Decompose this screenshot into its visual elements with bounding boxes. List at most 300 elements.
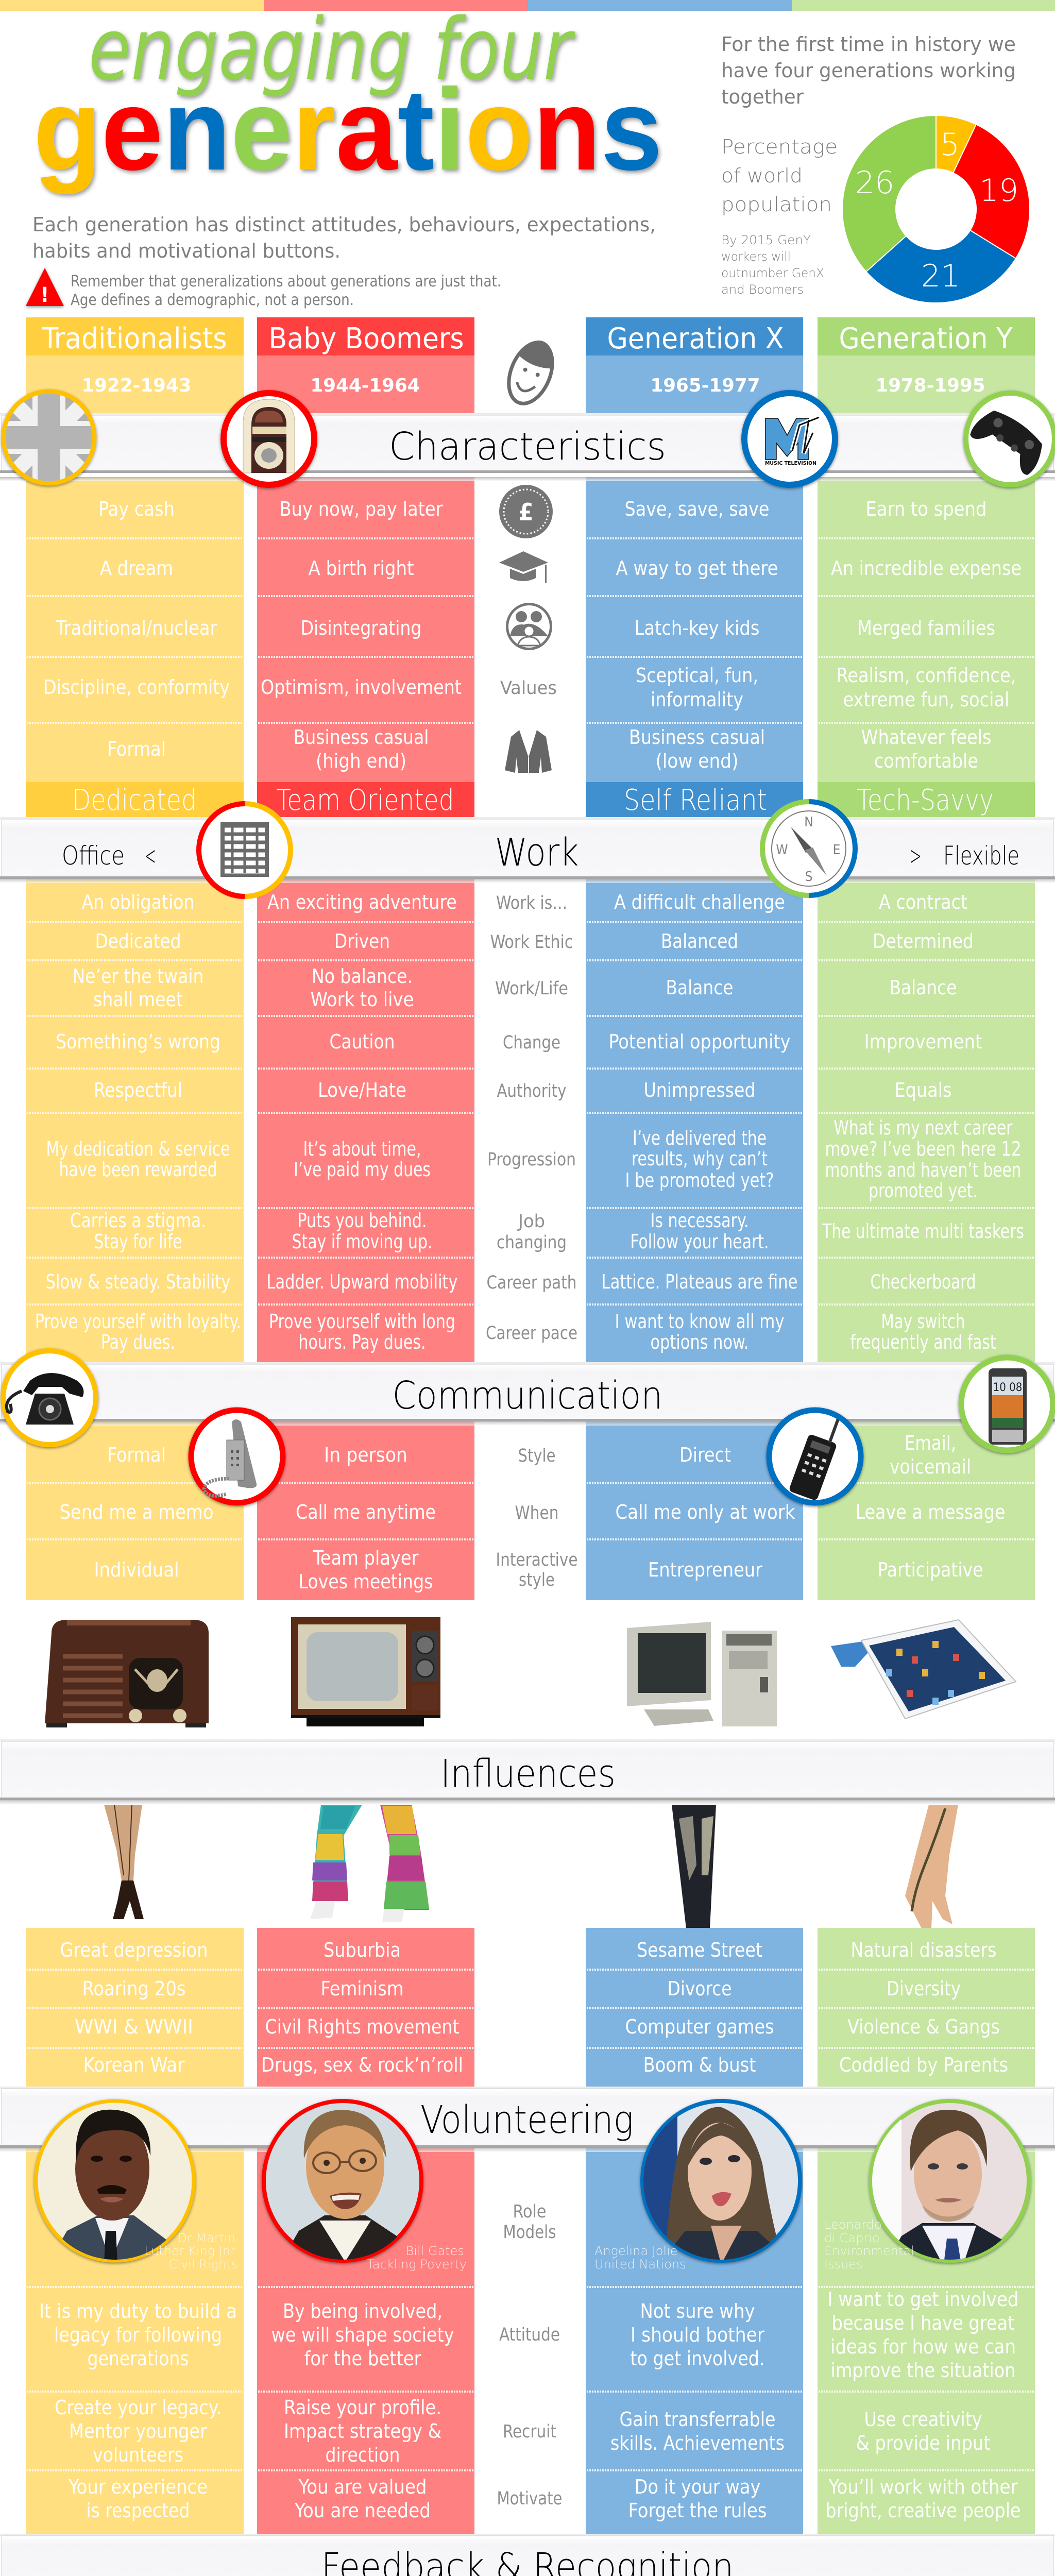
heading: Communication: Communication xyxy=(393,1374,662,1418)
cell: No balance xyxy=(310,965,414,1011)
cell: Your experience is respected: is respected xyxy=(87,2499,190,2522)
cell: Computer games: Computer games xyxy=(625,2015,774,2038)
title: generations: generations xyxy=(33,64,662,194)
percentage caption: Percentage xyxy=(721,135,838,158)
panel: Generation X characteristics xyxy=(586,355,803,819)
cell: Drugs, sex & rock'n'roll: Drugs, sex & rock’n’roll xyxy=(261,2054,463,2076)
trait: Tech-Savvy: Tech-Savvy xyxy=(857,784,994,817)
cell: Caution: Caution xyxy=(330,1030,395,1053)
cell: Team player xyxy=(299,1547,433,1593)
label: Office: Office xyxy=(62,841,125,871)
cell: By being involved: for the better xyxy=(304,2347,421,2370)
cell: Business casual (low end): (low end) xyxy=(655,750,739,772)
cell: Gain transferrable skills: skills. Achievements xyxy=(610,2432,785,2454)
cell: Natural disasters: Natural disasters xyxy=(851,1939,996,1961)
cell: I've delivered the results: I’ve delivered the xyxy=(633,1127,767,1149)
panel: Baby Boomers influences xyxy=(257,1928,474,2089)
caption: Dr Martin Luther King Jnr: Luther King Jnr xyxy=(144,2244,235,2258)
cell: Call me only at work: Call me only at work xyxy=(615,1501,795,1523)
heading band: Communication xyxy=(0,1362,1055,1426)
panel: Traditionalists influences xyxy=(26,1928,244,2089)
arrow: less than: < xyxy=(145,841,156,871)
cell: Optimism, involvement: Optimism, involvement xyxy=(261,676,462,699)
cell: Individual: Individual xyxy=(94,1558,179,1581)
GenY note: and Boomers xyxy=(721,282,804,297)
cell: Formal: Formal xyxy=(107,738,166,760)
label: Change: Change xyxy=(503,1032,560,1053)
label: Work Ethic: Work Ethic xyxy=(490,932,573,953)
caption: Angelina Jolie: United Nations xyxy=(594,2257,686,2272)
cell: Checkerboard: Checkerboard xyxy=(871,1270,976,1293)
cell: Balanced: Balanced xyxy=(661,930,738,953)
icon: rotary telephone circle xyxy=(3,1351,96,1445)
caption: Angelina Jolie: Angelina Jolie xyxy=(594,2244,678,2258)
intro text: habits and motivational buttons. xyxy=(32,240,341,262)
header: Generation Y xyxy=(818,317,1035,355)
label: Role Models: Role xyxy=(513,2201,546,2222)
label: Role Models xyxy=(503,2201,556,2243)
label: Job changing: changing xyxy=(497,1232,567,1253)
cell: It's about time: I’ve paid my dues xyxy=(294,1158,431,1181)
heading: Influences: Influences xyxy=(440,1752,616,1796)
cell: An exciting adventure: An exciting adventure xyxy=(267,891,457,913)
cell: I want to know all my options xyxy=(615,1310,784,1353)
cell: Whatever feels comfortable: comfortable xyxy=(874,750,978,772)
panel: Traditionalists volunteering xyxy=(26,2148,244,2536)
cell: Slow & steady: Slow & steady. Stability xyxy=(45,1270,231,1293)
cell: I want to know all my options: I want to know all my xyxy=(615,1310,784,1333)
cell: Whatever feels comfortable: Whatever feels xyxy=(861,726,991,749)
icon: union jack circle xyxy=(3,392,95,484)
panel: Generation Y influences xyxy=(818,1928,1035,2089)
warning note: Remember that generalizations about generations are just that. xyxy=(71,273,501,291)
cell: Ne'er the twain shall meet: Ne’er the twain xyxy=(72,965,204,988)
cell: Use creativity: Use creativity xyxy=(864,2408,982,2431)
years: 1944-1964 xyxy=(310,375,420,396)
cell: Send me a memo: Send me a memo xyxy=(60,1501,213,1523)
cell: An obligation: An obligation xyxy=(81,891,195,913)
cell: I've delivered the results: results, why can’t xyxy=(632,1147,768,1170)
caption: Leonardo di Caprio: Issues xyxy=(824,2257,863,2272)
heading: Work: Work xyxy=(495,831,579,875)
donut chart: percentage of world population: 5 xyxy=(940,127,960,163)
cell: Ne'er the twain shall meet: shall meet xyxy=(93,988,183,1011)
label: Career pace: Career pace xyxy=(486,1323,577,1344)
label: Progression: Progression xyxy=(487,1149,576,1170)
years: 1978-1995 xyxy=(876,375,985,396)
cell: I want to get involved xyxy=(827,2288,1019,2382)
cell: What is my next career move: What is my next career xyxy=(833,1116,1013,1139)
cell: Realism, confidence, extreme fun, social: Realism, confidence, xyxy=(837,664,1016,687)
icon: compass circle: E xyxy=(833,842,840,858)
panel: Generation Y work xyxy=(818,879,1035,1364)
cell: Korean War: Korean War xyxy=(83,2054,185,2076)
cell: Is necessary: Follow your heart. xyxy=(631,1230,769,1253)
warning note xyxy=(71,273,501,309)
panel: Generation X volunteering xyxy=(586,2148,803,2536)
icon: smartphone circle: 10 08 xyxy=(993,1381,1022,1394)
cell: Love/Hate: Love/Hate xyxy=(318,1079,406,1101)
section columns: volunteering xyxy=(26,2148,1035,2536)
trait: Self Reliant: Self Reliant xyxy=(624,784,767,817)
donut chart: percentage of world population: 26 xyxy=(855,165,894,201)
cell: Sceptical, fun, informality: informality xyxy=(651,688,743,711)
image: vintage radio xyxy=(45,1620,209,1727)
image: old desktop computer xyxy=(627,1622,777,1726)
cell: Boom & bust: Boom & bust xyxy=(643,2054,756,2076)
cell: Carries a stigma: Stay for life xyxy=(94,1230,182,1253)
arrow: greater than: > xyxy=(910,841,922,871)
cell: Whatever feels comfortable xyxy=(861,726,991,772)
trait: Dedicated: Dedicated xyxy=(72,784,197,817)
cell: Leave a message: Leave a message xyxy=(855,1501,1006,1523)
trait: Team Oriented: Team Oriented xyxy=(276,784,454,817)
panel: work row labels xyxy=(486,893,577,1344)
cell: Business casual (low end) xyxy=(629,726,765,772)
label: Flexible: Flexible xyxy=(943,841,1019,871)
heading band: Characteristics xyxy=(0,413,1055,481)
intro text: Each generation has distinct attitudes, behaviours, expectations, xyxy=(32,213,656,236)
cell: You are valued: You are valued xyxy=(298,2476,427,2498)
cell: Call me anytime: Call me anytime xyxy=(296,1501,436,1523)
cell: No balance: No balance. xyxy=(312,965,413,988)
cell: Unimpressed: Unimpressed xyxy=(644,1079,755,1101)
label: Role Models: Models xyxy=(503,2222,556,2243)
cell: Prove yourself with long hours: Prove yourself with long xyxy=(269,1310,455,1333)
cell: Email, voicemail xyxy=(890,1432,971,1478)
label: Motivate: Motivate xyxy=(497,2488,563,2509)
caption: Bill Gates: Bill Gates xyxy=(406,2244,464,2258)
donut chart: percentage of world population: 21 xyxy=(921,258,960,294)
cell: Email, voicemail: voicemail xyxy=(890,1455,971,1478)
heading band: Volunteering xyxy=(0,2087,1055,2152)
cell: Something's wrong: Something’s wrong xyxy=(56,1030,220,1053)
label: Job changing: Job xyxy=(517,1211,545,1232)
GenY note xyxy=(721,233,824,297)
cell: Balance: Balance xyxy=(666,976,734,999)
label: Interactive style xyxy=(496,1550,578,1590)
cell: Your experience is respected: Your experience xyxy=(68,2476,208,2498)
icon: MTV logo circle xyxy=(744,393,835,485)
image: tablet xyxy=(831,1620,1016,1719)
panel: Baby Boomers communication xyxy=(257,1421,474,1600)
cell: My dedication & service: My dedication & service xyxy=(46,1138,230,1160)
cell: Lattice: Lattice. Plateaus are fine xyxy=(602,1270,797,1293)
icon: pound coin xyxy=(499,485,553,538)
cell: It's about time xyxy=(294,1138,431,1181)
image: stockinged legs xyxy=(104,1805,144,1919)
cell: Prove yourself with long hours: hours. Pay dues. xyxy=(299,1331,426,1353)
cell: Buy now, pay later: Buy now, pay later xyxy=(279,498,443,520)
panel: Traditionalists characteristics xyxy=(26,355,244,819)
history statement: together xyxy=(721,86,804,108)
panel: volunteering row labels xyxy=(497,2201,563,2509)
label: Attitude: Attitude xyxy=(499,2325,560,2345)
cell: Raise your profile: direction xyxy=(326,2444,400,2466)
cell: Ne'er the twain shall meet xyxy=(72,965,204,1011)
icon: compass circle: S xyxy=(805,869,812,885)
section columns: work xyxy=(26,879,1035,1364)
cell: Raise your profile: Impact strategy & xyxy=(284,2420,441,2443)
caption: Bill Gates xyxy=(367,2244,467,2272)
section columns: influences xyxy=(26,1928,1035,2089)
cell: Team player: Loves meetings xyxy=(299,1570,433,1593)
cell: I want to know all my options: options now. xyxy=(650,1331,749,1353)
cell: Business casual (high end): (high end) xyxy=(316,750,406,772)
header: Traditionalists: Traditionalists xyxy=(41,322,227,355)
cell: Business casual (high end): Business casual xyxy=(294,726,429,749)
cell: Do it your way xyxy=(628,2476,767,2522)
cell: Balance: Balance xyxy=(889,976,957,999)
cell: Not sure why xyxy=(631,2300,765,2370)
cell: A birth right: A birth right xyxy=(308,557,414,580)
cell: It's about time: It’s about time, xyxy=(303,1138,421,1160)
cell: No balance: Work to live xyxy=(310,988,414,1011)
cell: Prove yourself with long hours xyxy=(269,1310,455,1353)
intro text xyxy=(32,213,656,262)
cell: You'll work with other xyxy=(825,2476,1021,2522)
cell: Your experience is respected xyxy=(68,2476,208,2522)
cell: May switch frequently: frequently and fast xyxy=(850,1331,996,1353)
heading band: Feedback & Recognition xyxy=(0,2534,1055,2576)
cell: Business casual (high end) xyxy=(294,726,429,772)
years: 1965-1977 xyxy=(650,375,760,396)
cell: My dedication & service: have been rewarded xyxy=(59,1158,217,1181)
panel: communication row labels xyxy=(496,1446,578,1590)
cell: It is my duty: It is my duty to build a xyxy=(39,2300,237,2323)
label: Interactive style: Interactive xyxy=(496,1550,578,1570)
label: Career path: Career path xyxy=(486,1273,577,1293)
label: Recruit: Recruit xyxy=(503,2421,556,2442)
donut chart: percentage of world population: 19 xyxy=(979,173,1018,209)
cell: Direct: Direct xyxy=(679,1444,731,1466)
cell: May switch frequently xyxy=(850,1310,996,1353)
icon: wall phone circle xyxy=(191,1410,283,1503)
GenY note: outnumber GenX xyxy=(721,266,824,280)
header: Generation X xyxy=(586,317,803,355)
panel: Generation X communication xyxy=(586,1421,803,1600)
icon: smartphone circle xyxy=(961,1358,1053,1450)
icon: jacket xyxy=(505,730,552,773)
image: vintage television xyxy=(291,1617,440,1726)
cell: Roaring 20s: Roaring 20s xyxy=(82,1977,185,2000)
panel: Baby Boomers characteristics xyxy=(257,355,474,819)
label: Job changing xyxy=(497,1211,567,1253)
cell: Entrepreneur: Entrepreneur xyxy=(648,1558,763,1581)
cell: Merged families: Merged families xyxy=(857,617,995,639)
cell: A dream: A dream xyxy=(100,557,173,580)
cell: It is my duty: generations xyxy=(88,2347,189,2370)
cell: Is necessary xyxy=(631,1209,769,1253)
cell: Formal: Formal xyxy=(107,1444,166,1466)
generation headers xyxy=(26,317,1035,355)
icon: pound coin: £ xyxy=(519,498,533,526)
panel: Generation Y communication xyxy=(818,1421,1035,1600)
cell: Civil Rights movement: Civil Rights movement xyxy=(265,2015,460,2038)
portrait: Leonardo di Caprio xyxy=(871,2101,1029,2264)
cell: A contract: A contract xyxy=(879,891,967,913)
icon: people circle xyxy=(506,603,552,650)
cell: Determined: Determined xyxy=(873,930,974,953)
cell: Respectful: Respectful xyxy=(94,1079,182,1101)
heading: Characteristics: Characteristics xyxy=(389,425,666,469)
cell: Feminism: Feminism xyxy=(320,1977,404,2000)
cell: Not sure why: I should bother xyxy=(631,2324,765,2346)
cell: By being involved: we will shape society xyxy=(271,2324,454,2346)
cell: Carries a stigma xyxy=(70,1209,206,1253)
portrait: Angelina Jolie xyxy=(641,2101,800,2264)
cell: Raise your profile: Raise your profile. xyxy=(284,2396,441,2419)
cell: Equals: Equals xyxy=(894,1079,952,1101)
cell: Realism, confidence, extreme fun, social xyxy=(837,664,1016,711)
caption: Dr Martin Luther King Jnr: Dr Martin xyxy=(177,2231,235,2245)
panel: Baby Boomers volunteering xyxy=(257,2148,474,2536)
cell: A way to get there: A way to get there xyxy=(616,557,778,580)
cell: Dedicated: Dedicated xyxy=(95,930,181,953)
label: When: When xyxy=(515,1503,558,1523)
header: Generation X: Generation X xyxy=(607,322,784,355)
cell: Participative: Participative xyxy=(878,1558,983,1581)
cell: Create your legacy xyxy=(55,2396,222,2466)
icon: compass circle xyxy=(762,802,855,895)
cell: Do it your way: Forget the rules xyxy=(628,2499,767,2522)
portrait: Bill Gates xyxy=(264,2101,421,2267)
GenY note: By 2015 GenY xyxy=(721,233,811,247)
cell: Pay cash: Pay cash xyxy=(98,498,175,520)
GenY note: workers will xyxy=(721,249,791,264)
cell: By being involved xyxy=(271,2300,454,2370)
cell: Divorce: Divorce xyxy=(668,1977,731,2000)
cell: Driven: Driven xyxy=(334,930,390,953)
cell: Violence & Gangs: Violence & Gangs xyxy=(847,2015,1000,2038)
cell: The ultimate multi taskers: The ultimate multi taskers xyxy=(822,1220,1024,1243)
cell: Not sure why: Not sure why xyxy=(640,2300,755,2323)
cell: Potential opportunity: Potential opportunity xyxy=(609,1030,790,1053)
icon: office building circle xyxy=(199,804,291,896)
caption: Dr Martin Luther King Jnr: Civil Rights xyxy=(169,2257,237,2272)
cell: Use creativity: & provide input xyxy=(856,2432,990,2454)
cell: Gain transferrable skills xyxy=(610,2408,785,2454)
label: Style: Style xyxy=(518,1446,555,1466)
section columns: communication xyxy=(26,1421,1035,1600)
image: dark patterned jeans xyxy=(672,1805,716,1928)
cell: An incredible expense: An incredible expense xyxy=(831,557,1022,580)
cell: A difficult challenge: A difficult challenge xyxy=(614,891,785,913)
years: 1922-1943 xyxy=(81,375,192,396)
caption: Leonardo di Caprio: Leonardo xyxy=(824,2217,882,2232)
panel: Generation X influences xyxy=(586,1928,803,2089)
cell: I've delivered the results: I be promoted yet? xyxy=(625,1169,774,1192)
header: Generation Y: Generation Y xyxy=(839,322,1013,355)
cell: It is my duty xyxy=(39,2300,237,2370)
icon: game controller circle xyxy=(966,393,1054,485)
panel: Generation X work xyxy=(586,879,803,1364)
cell: May switch frequently: May switch xyxy=(881,1310,965,1333)
cell: You'll work with other: You’ll work with other xyxy=(828,2476,1018,2498)
cell: Sceptical, fun, informality xyxy=(636,664,758,711)
cell: You'll work with other: bright, creative people xyxy=(825,2499,1021,2522)
cell: Coddled by Parents: Coddled by Parents xyxy=(839,2054,1008,2076)
cell: My dedication & service xyxy=(46,1138,230,1181)
icon: compass circle: N xyxy=(804,815,813,830)
cell: Earn to spend: Earn to spend xyxy=(865,498,987,520)
cell: Disintegrating: Disintegrating xyxy=(301,617,421,639)
cell: Not sure why: to get involved. xyxy=(631,2347,764,2370)
cell: By being involved: By being involved, xyxy=(283,2300,443,2323)
heading band: Work xyxy=(0,817,1055,883)
icon: jukebox circle xyxy=(224,393,314,485)
icon: MTV logo circle: MUSIC TELEVISION xyxy=(765,461,816,466)
cell: Is necessary: Is necessary. xyxy=(650,1209,749,1232)
cell: It is my duty: legacy for following xyxy=(54,2324,222,2346)
icon: warning triangle: ! xyxy=(41,283,49,307)
label: Interactive style: style xyxy=(519,1570,555,1590)
cell: Team player: Team player xyxy=(313,1547,419,1569)
cell: In person: In person xyxy=(324,1444,407,1466)
panel: Generation Y characteristics xyxy=(818,355,1035,819)
cell: Improvement: Improvement xyxy=(864,1030,982,1053)
cell: Do it your way: Do it your way xyxy=(635,2476,760,2498)
percentage caption: of world xyxy=(721,164,803,187)
cell: Puts you behind xyxy=(292,1209,433,1253)
caption: Leonardo di Caprio: Environmental xyxy=(824,2244,914,2258)
cell: Realism, confidence, extreme fun, social: extreme fun, social xyxy=(843,688,1010,711)
cell: Puts you behind: Stay if moving up. xyxy=(292,1230,433,1253)
cell: Diversity: Diversity xyxy=(887,1977,961,2000)
panel: Baby Boomers work xyxy=(257,879,474,1364)
cell: Puts you behind: Puts you behind. xyxy=(298,1209,427,1232)
cell: Traditional/nuclear: Traditional/nuclear xyxy=(56,617,217,639)
cell: Create your legacy: volunteers xyxy=(93,2444,183,2466)
label: Authority: Authority xyxy=(497,1081,567,1101)
cell: Sesame Street: Sesame Street xyxy=(637,1939,762,1961)
cell: You are valued: You are needed xyxy=(294,2499,431,2522)
cell: What is my next career move: months and haven’t been xyxy=(825,1159,1021,1181)
caption: Leonardo di Caprio: di Caprio xyxy=(824,2231,879,2245)
label: Work/Life: Work/Life xyxy=(495,978,568,999)
header: Baby Boomers: Baby Boomers xyxy=(269,322,464,355)
cell: Create your legacy: Mentor younger xyxy=(69,2420,208,2443)
cell: Prove yourself with loyalty: Prove yourself with loyalty. xyxy=(35,1310,241,1333)
icon: brick mobile circle xyxy=(769,1410,861,1503)
top colour strip xyxy=(0,0,1055,11)
icon: graduation cap xyxy=(499,551,548,583)
cell: Latch-key kids: Latch-key kids xyxy=(635,617,759,639)
cell: Prove yourself with loyalty: Pay dues. xyxy=(101,1331,175,1353)
cell: Gain transferrable skills: Gain transferrable xyxy=(619,2408,776,2431)
caption: Leonardo di Caprio xyxy=(824,2217,914,2272)
panel: Generation Y volunteering xyxy=(818,2148,1035,2536)
caption: Bill Gates: Tackling Poverty xyxy=(367,2257,467,2272)
cell: What is my next career move: promoted yet. xyxy=(869,1179,978,1202)
cell: Raise your profile xyxy=(284,2396,441,2466)
panel: Traditionalists work xyxy=(26,879,244,1364)
cell: What is my next career move: move? I’ve been here 12 xyxy=(825,1138,1021,1160)
icon: compass circle: W xyxy=(776,842,788,858)
section columns: characteristics xyxy=(26,355,1035,819)
donut chart: percentage of world population xyxy=(842,115,1030,303)
history statement: For the first time in history we xyxy=(721,33,1016,56)
label: Values: Values xyxy=(500,678,557,699)
caption: Dr Martin Luther King Jnr xyxy=(144,2231,237,2272)
cell: I want to get involved: I want to get involved xyxy=(827,2288,1019,2311)
heading band: Influences xyxy=(0,1739,1055,1805)
cell: I want to get involved: because I have great xyxy=(831,2312,1015,2334)
percentage caption: population xyxy=(721,193,832,216)
cell: Use creativity xyxy=(856,2408,990,2454)
icon: warning triangle xyxy=(26,268,64,307)
cell: You are valued xyxy=(294,2476,431,2522)
